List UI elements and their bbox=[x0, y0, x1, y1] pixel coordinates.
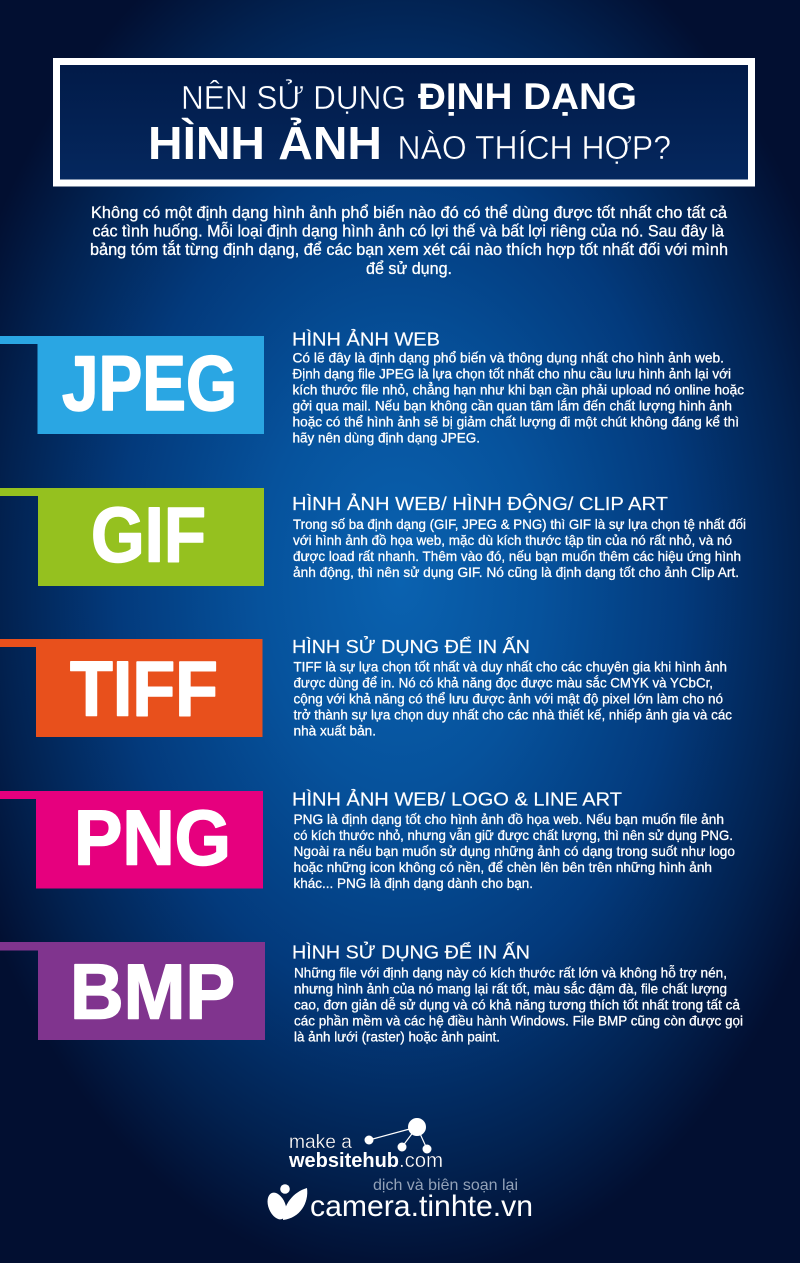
TIFF description: được dùng để in. Nó có khả năng đọc được màu sắc CMYK và YCbCr, bbox=[294, 675, 713, 691]
TIFF label: TIFF bbox=[70, 644, 218, 732]
title bbox=[56, 62, 752, 183]
PNG description: có kích thước nhỏ, nhưng vẫn giữ được chất lượng, thì nên sử dụng PNG. bbox=[294, 827, 733, 843]
panel: TIFF bbox=[0, 636, 732, 739]
logo: camera.tinhte.vn: dịch và biên soạn lại bbox=[373, 1177, 518, 1194]
BMP description: cao, đơn giản dễ sử dụng và có khả năng tương thích tốt nhất trong tất cả bbox=[294, 996, 740, 1012]
panel: PNG bbox=[0, 789, 735, 891]
GIF description: ảnh động, thì nên sử dụng GIF. Nó cũng là định dạng tốt cho ảnh Clip Art. bbox=[293, 564, 739, 580]
PNG label block bbox=[0, 791, 263, 888]
BMP label: BMP bbox=[70, 948, 235, 1036]
JPEG description: Có lẽ đây là định dạng phổ biến và thông dụng nhất cho hình ảnh web. bbox=[292, 350, 724, 366]
logo: camera.tinhte.vn: camera.tinhte.vn bbox=[310, 1190, 533, 1223]
PNG description: hoặc những icon không có nền, để chèn lên bên trên những hình ảnh bbox=[294, 859, 712, 875]
JPEG description bbox=[292, 350, 744, 446]
icon: network nodes bbox=[365, 1118, 431, 1153]
title: HÌNH ẢNH bbox=[148, 117, 382, 169]
JPEG description: hoặc có thể hình ảnh sẽ bị giảm chất lượng đi một chút không đáng kể thì bbox=[292, 414, 739, 430]
TIFF description bbox=[294, 659, 732, 739]
BMP description bbox=[294, 964, 743, 1044]
TIFF description: TIFF là sự lựa chọn tốt nhất và duy nhất cho các chuyên gia khi hình ảnh bbox=[294, 659, 727, 675]
GIF label block bbox=[0, 488, 264, 586]
BMP description: các phần mềm và các hệ điều hành Windows. File BMP cũng còn được gọi bbox=[294, 1012, 743, 1028]
BMP description: Những file với định dạng này có kích thước rất lớn và không hỗ trợ nén, bbox=[294, 964, 727, 980]
GIF label: GIF bbox=[91, 490, 206, 578]
logo: make a websitehub.com: websitehub bbox=[288, 1150, 399, 1172]
GIF description: với hình ảnh đồ họa web, mặc dù kích thước tập tin của nó rất nhỏ, và nó bbox=[293, 532, 732, 548]
title: ĐỊNH DẠNG bbox=[418, 76, 637, 117]
JPEG description: Định dạng file JPEG là lựa chọn tốt nhất cho nhu cầu lưu hình ảnh lại với bbox=[292, 366, 731, 382]
logo: make a websitehub.com bbox=[288, 1118, 443, 1172]
PNG description bbox=[294, 811, 735, 891]
GIF description: Trong số ba định dạng (GIF, JPEG & PNG) thì GIF là sự lựa chọn tệ nhất đối bbox=[293, 516, 746, 532]
intro text bbox=[90, 204, 728, 278]
intro text: bảng tóm tắt từng định dạng, để các bạn xem xét cái nào thích hợp tốt nhất đối với mình bbox=[90, 240, 728, 259]
JPEG description: hãy nên dùng định dạng JPEG. bbox=[292, 430, 480, 446]
intro text: Không có một định dạng hình ảnh phổ biến nào đó có thể dùng được tốt nhất cho tất cả bbox=[91, 204, 728, 222]
panel: BMP bbox=[0, 941, 743, 1044]
JPEG description: kích thước file nhỏ, chẳng hạn như khi bạn cần phải upload nó online hoặc bbox=[292, 381, 744, 398]
TIFF label block bbox=[0, 639, 262, 737]
JPEG heading: HÌNH ẢNH WEB bbox=[292, 329, 440, 350]
logo: camera.tinhte.vn bbox=[264, 1177, 533, 1223]
BMP heading: HÌNH SỬ DỤNG ĐỂ IN ẤN bbox=[292, 941, 530, 962]
logo: make a websitehub.com: make a bbox=[289, 1132, 352, 1153]
icon: camera tinhte leaves bbox=[264, 1184, 307, 1222]
logo: make a websitehub.com: .com bbox=[399, 1150, 443, 1172]
GIF heading: HÌNH ẢNH WEB/ HÌNH ĐỘNG/ CLIP ART bbox=[292, 493, 668, 514]
intro text: để sử dụng. bbox=[366, 260, 452, 278]
BMP description: nhưng hình ảnh của nó mang lại rất tốt, màu sắc đậm đà, file chất lượng bbox=[294, 980, 727, 996]
TIFF heading: HÌNH SỬ DỤNG ĐỂ IN ẤN bbox=[292, 636, 530, 657]
intro text: các tình huống. Mỗi loại định dạng hình ảnh có lợi thế và bất lợi riêng của nó. Sau đây là bbox=[92, 222, 725, 240]
JPEG description: gởi qua mail. Nếu bạn không cần quan tâm lắm đến chất lượng hình ảnh bbox=[292, 398, 732, 414]
TIFF description: trở thành sự lựa chọn duy nhất cho các nhà thiết kế, nhiếp ảnh gia và các bbox=[294, 707, 732, 723]
PNG description: khác... PNG là định dạng dành cho bạn. bbox=[294, 875, 533, 891]
JPEG label: JPEG bbox=[62, 339, 237, 427]
PNG description: Ngoài ra nếu bạn muốn sử dụng những ảnh có dạng trong suốt như logo bbox=[294, 843, 735, 859]
title: NÀO THÍCH HỢP? bbox=[398, 129, 671, 166]
PNG label: PNG bbox=[74, 794, 231, 882]
BMP label block bbox=[0, 942, 265, 1040]
TIFF description: nhà xuất bản. bbox=[294, 723, 376, 739]
PNG heading: HÌNH ẢNH WEB/ LOGO & LINE ART bbox=[292, 789, 622, 810]
GIF description: được load rất nhanh. Thêm vào đó, nếu bạn muốn thêm các hiệu ứng hình bbox=[293, 548, 741, 564]
TIFF description: cộng với khả năng có thể lưu được ảnh với mật độ pixel lớn làm cho nó bbox=[294, 691, 723, 707]
panel: GIF bbox=[0, 488, 746, 586]
PNG description: PNG là định dạng tốt cho hình ảnh đồ họa web. Nếu bạn muốn file ảnh bbox=[294, 811, 724, 827]
panel: JPEG bbox=[0, 329, 744, 446]
BMP description: là ảnh lưới (raster) hoặc ảnh paint. bbox=[294, 1028, 500, 1044]
GIF description bbox=[293, 516, 746, 580]
title: NÊN SỬ DỤNG bbox=[181, 79, 406, 116]
JPEG label block bbox=[0, 336, 264, 434]
